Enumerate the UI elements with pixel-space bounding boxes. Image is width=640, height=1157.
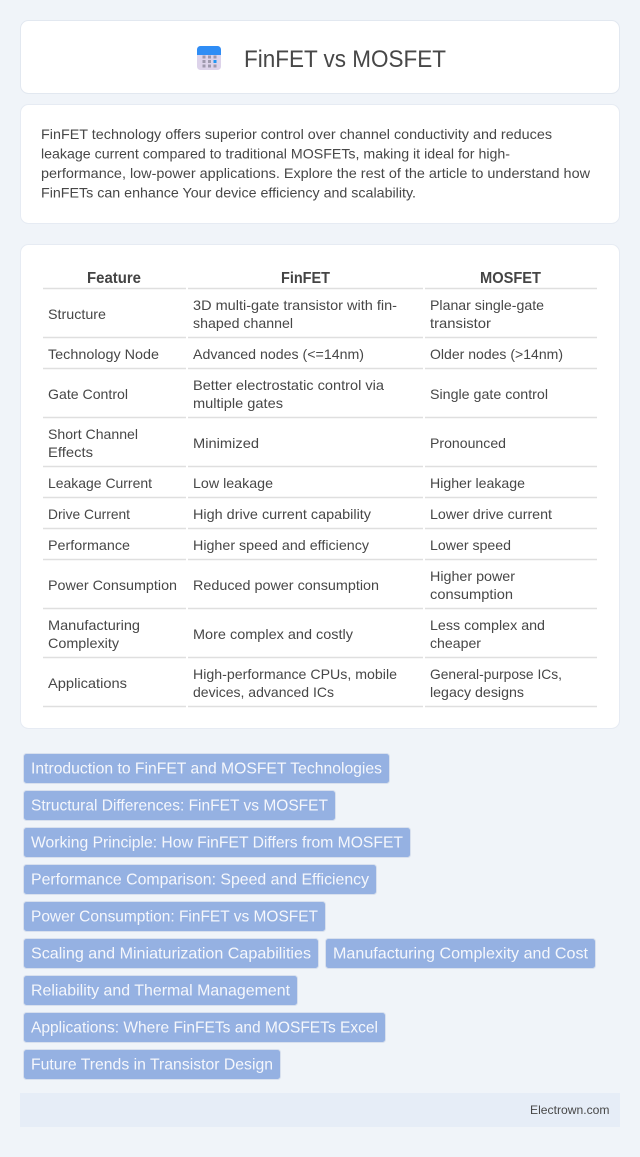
row: Structure: Planar single-gate <box>430 297 544 313</box>
row: Drive Current: Drive Current <box>48 506 130 522</box>
tag: scaling <box>24 938 318 968</box>
table header row: FinFET <box>281 270 330 287</box>
tag: structural differences: Structural Differences: FinFET vs MOSFET <box>31 798 328 814</box>
tag: structural differences <box>24 790 336 820</box>
row: Applications: devices, advanced ICs <box>193 684 334 700</box>
row: Performance <box>43 537 597 560</box>
row: Applications: General-purpose ICs, <box>430 666 562 682</box>
topic tags <box>24 754 596 1080</box>
row: Manufacturing Complexity: cheaper <box>430 635 481 651</box>
row: Applications: Applications <box>48 675 127 691</box>
footer credit: Electrown.com <box>530 1103 610 1117</box>
tag: working principle: Working Principle: How FinFET Differs from MOSFET <box>31 834 403 852</box>
tag: performance comparison <box>24 864 376 894</box>
row: Structure: 3D multi-gate transistor with fin- <box>193 297 397 313</box>
tag: scaling: Scaling and Miniaturization Capabilities <box>31 946 311 962</box>
intro card <box>20 104 620 224</box>
row: Gate Control: Better electrostatic control via <box>193 377 384 393</box>
tag: future trends <box>24 1050 280 1080</box>
footer <box>20 1093 620 1127</box>
row: Structure: Structure <box>48 306 106 322</box>
row: Structure: shaped channel <box>193 315 293 331</box>
row: Gate Control <box>43 377 597 418</box>
row: Gate Control: multiple gates <box>193 395 283 411</box>
row: Drive Current: Lower drive current <box>430 506 552 522</box>
row: Short Channel Effects: Effects <box>48 444 93 460</box>
header card <box>20 20 620 94</box>
row: Performance: Lower speed <box>430 537 511 553</box>
title: FinFET vs MOSFET <box>244 46 446 73</box>
row: Short Channel Effects: Short Channel <box>48 426 138 442</box>
icon: calendar <box>197 46 221 70</box>
tag: applications: Applications: Where FinFETs and MOSFETs Excel <box>31 1020 378 1036</box>
table header row <box>43 270 597 288</box>
tag: power consumption: Power Consumption: FinFET vs MOSFET <box>31 908 318 926</box>
row: Power Consumption: Higher power <box>430 568 515 584</box>
intro paragraph: FinFETs can enhance Your device efficiency and scalability. <box>41 184 416 200</box>
row: Manufacturing Complexity: Complexity <box>48 635 119 651</box>
tag: future trends: Future Trends in Transistor Design <box>31 1056 273 1074</box>
row: Performance: Higher speed and efficiency <box>193 537 369 553</box>
table header row: MOSFET <box>480 270 541 287</box>
tag: performance comparison: Performance Comparison: Speed and Efficiency <box>31 872 369 888</box>
row: Structure <box>43 297 597 338</box>
row: Technology Node: Technology Node <box>48 346 159 362</box>
tag: working principle <box>24 828 410 858</box>
tag: manufacturing <box>326 938 596 968</box>
tag: reliability <box>24 976 298 1006</box>
tag: manufacturing: Manufacturing Complexity and Cost <box>333 946 589 962</box>
row: Power Consumption <box>43 568 597 608</box>
row: Gate Control: Gate Control <box>48 386 128 402</box>
row: Applications: High-performance CPUs, mobile <box>193 666 397 682</box>
intro paragraph: performance, low-power applications. Explore the rest of the article to understand how <box>41 165 591 181</box>
row: Leakage Current: Higher leakage <box>430 475 525 491</box>
row: Power Consumption: Reduced power consumption <box>193 577 379 593</box>
row: Power Consumption: consumption <box>430 586 513 602</box>
row: Power Consumption: Power Consumption <box>48 577 177 593</box>
intro paragraph: FinFET technology offers superior control over channel conductivity and reduces <box>41 126 552 142</box>
row: Drive Current <box>43 506 597 528</box>
tag: power consumption <box>24 902 326 932</box>
tag: introduction: Introduction to FinFET and MOSFET Technologies <box>31 760 382 778</box>
row: Leakage Current: Leakage Current <box>48 475 152 491</box>
row: Technology Node: Older nodes (>14nm) <box>430 346 563 362</box>
row: Gate Control: Single gate control <box>430 386 548 402</box>
row: Manufacturing Complexity: Manufacturing <box>48 617 140 633</box>
row: Structure: transistor <box>430 315 491 331</box>
row: Short Channel Effects <box>43 426 597 466</box>
row: Performance: Performance <box>48 537 130 553</box>
intro paragraph <box>41 126 591 200</box>
table header row: Feature <box>87 270 141 287</box>
tag: reliability: Reliability and Thermal Management <box>31 982 291 1000</box>
row: Short Channel Effects: Minimized <box>193 435 259 451</box>
row: Drive Current: High drive current capability <box>193 506 371 522</box>
table card <box>20 244 620 728</box>
row: Manufacturing Complexity: Less complex and <box>430 617 545 633</box>
row: Leakage Current <box>43 475 597 498</box>
row: Applications <box>43 666 597 706</box>
row: Technology Node: Advanced nodes (<=14nm) <box>193 346 364 362</box>
row: Applications: legacy designs <box>430 684 524 700</box>
row: Technology Node <box>43 346 597 368</box>
tag: introduction <box>24 754 390 784</box>
row: Manufacturing Complexity: More complex and costly <box>193 626 353 642</box>
tag: applications <box>24 1012 386 1042</box>
row: Manufacturing Complexity <box>43 617 597 658</box>
row: Short Channel Effects: Pronounced <box>430 435 506 451</box>
intro paragraph: leakage current compared to traditional MOSFETs, making it ideal for high- <box>41 146 510 162</box>
row: Leakage Current: Low leakage <box>193 475 273 491</box>
